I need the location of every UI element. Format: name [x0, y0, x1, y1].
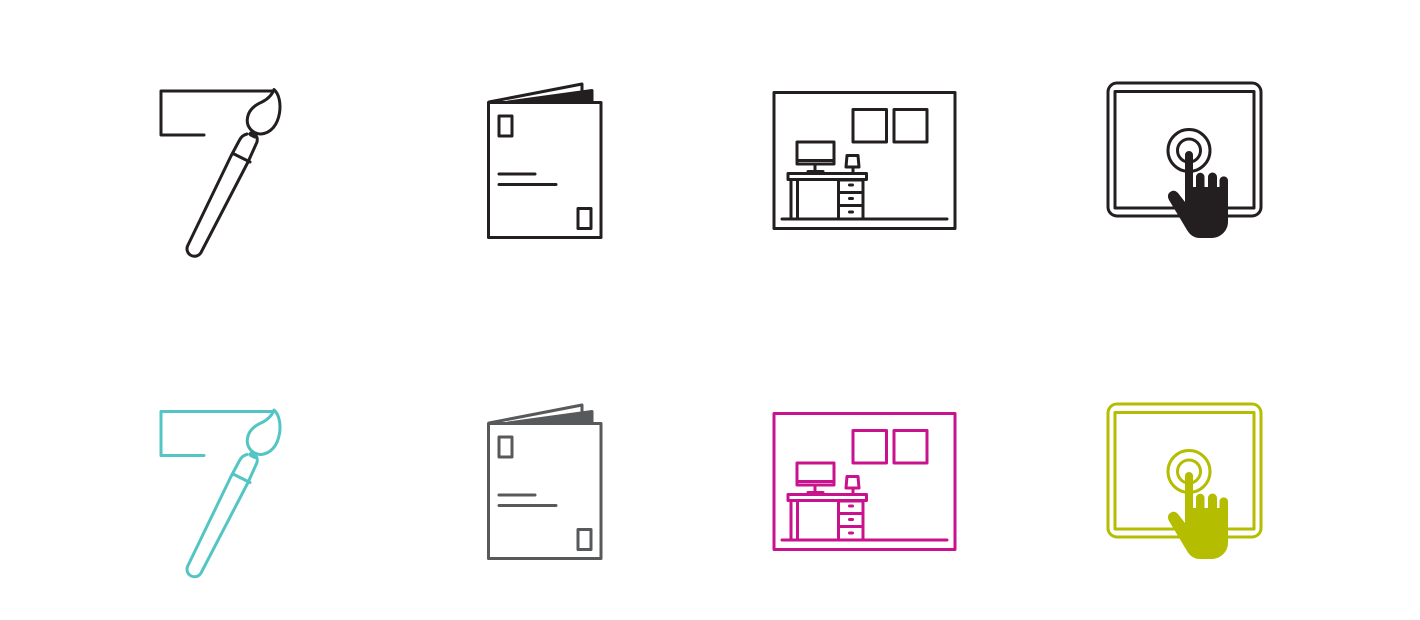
icon: brochure, black [488, 84, 601, 238]
icon: paintbrush seven, black [161, 90, 280, 256]
icon: paintbrush seven, teal [161, 410, 280, 577]
icon: brochure, grey [488, 405, 601, 558]
icon: touch tablet, black [1108, 83, 1261, 238]
icon: office desk, black [774, 92, 955, 228]
icon: touch tablet, lime [1108, 404, 1261, 559]
icon: office desk, magenta [774, 414, 955, 550]
